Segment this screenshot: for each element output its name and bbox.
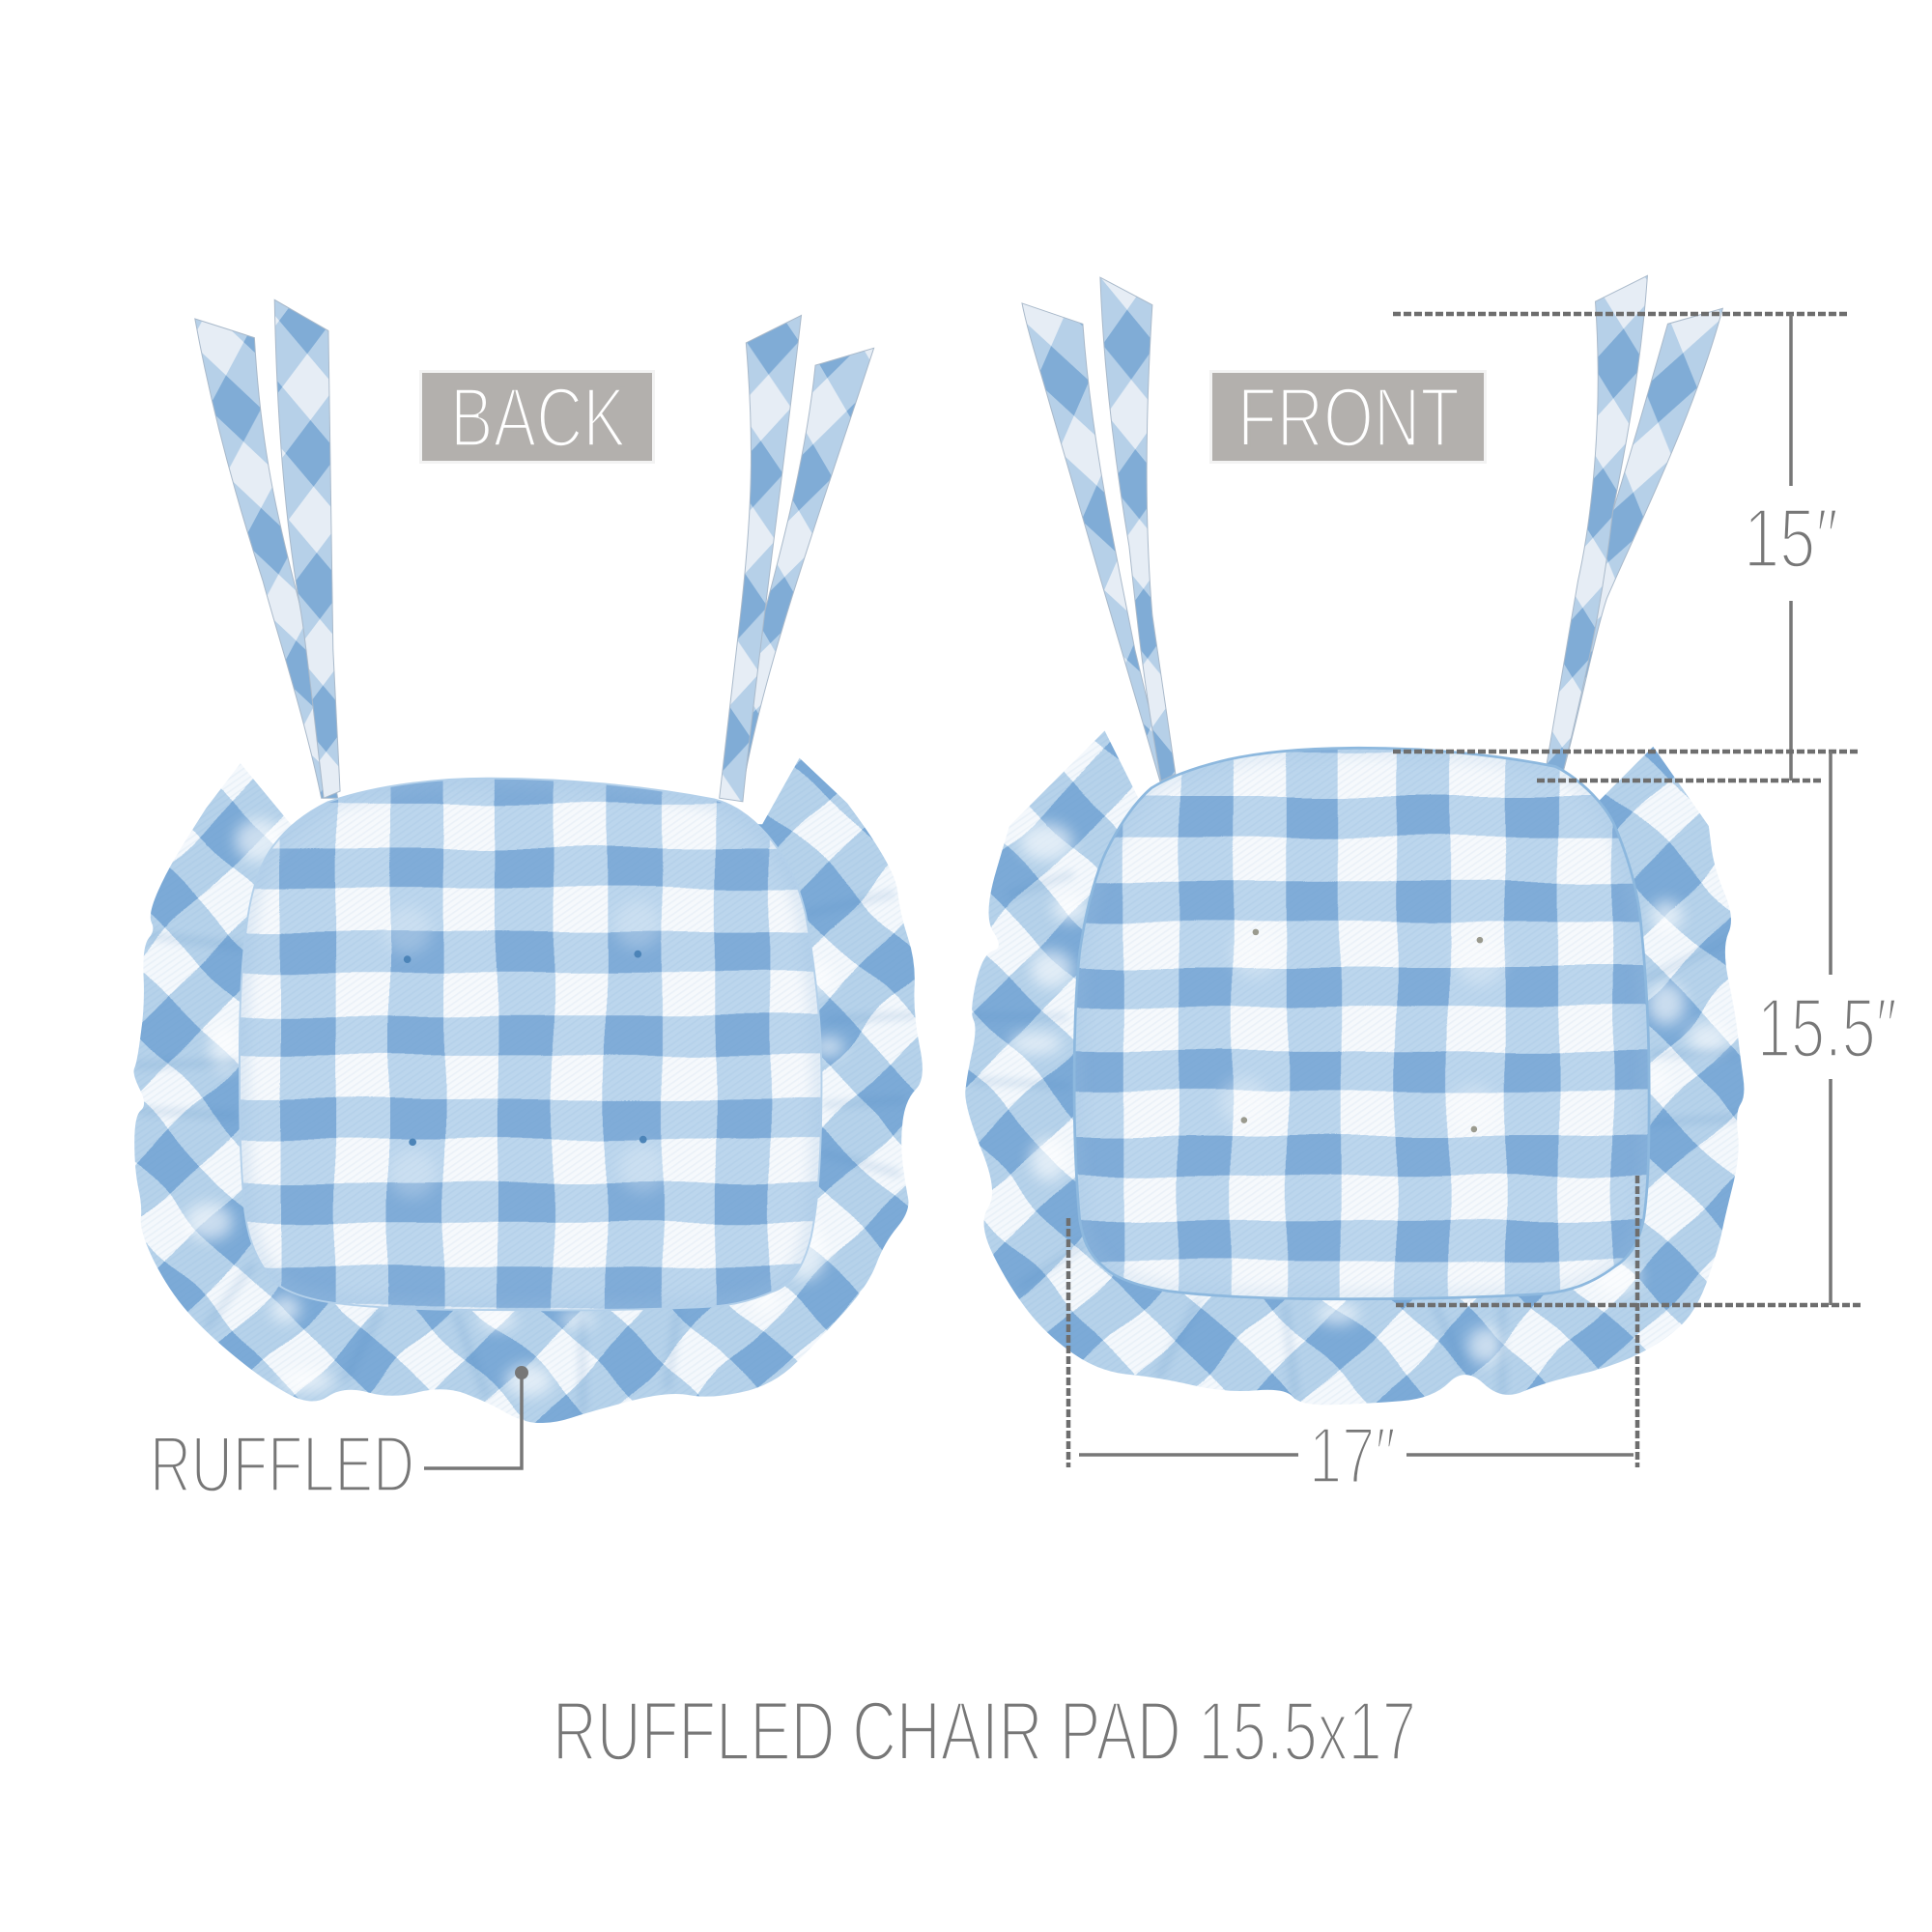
back ties right (720, 315, 874, 802)
front ruffle (965, 730, 1745, 1405)
panel: back view chair pad (133, 299, 923, 1423)
front cushion body (1072, 746, 1650, 1300)
front ties right (1547, 275, 1722, 771)
callout: ruffled: RUFFLED (150, 1419, 414, 1509)
back ruffle (133, 757, 923, 1423)
dimension: width 17 inches: 17″ (1309, 1410, 1396, 1500)
back cushion body (239, 777, 823, 1312)
front ties left (1022, 277, 1176, 784)
dimension: width 17 inches (1068, 1176, 1637, 1500)
title: RUFFLED CHAIR PAD 15.5x17 (553, 1685, 1416, 1778)
tufted buttons front (1220, 929, 1504, 1133)
tufted buttons back (384, 901, 667, 1198)
panel: front view chair pad (965, 274, 1745, 1405)
callout: ruffled (150, 1366, 528, 1509)
label: BACK: BACK (450, 371, 626, 465)
back ties left (195, 299, 340, 798)
label: FRONT: FRONT (1237, 371, 1460, 465)
dimension: tie length 15 inches: 15″ (1744, 492, 1838, 585)
